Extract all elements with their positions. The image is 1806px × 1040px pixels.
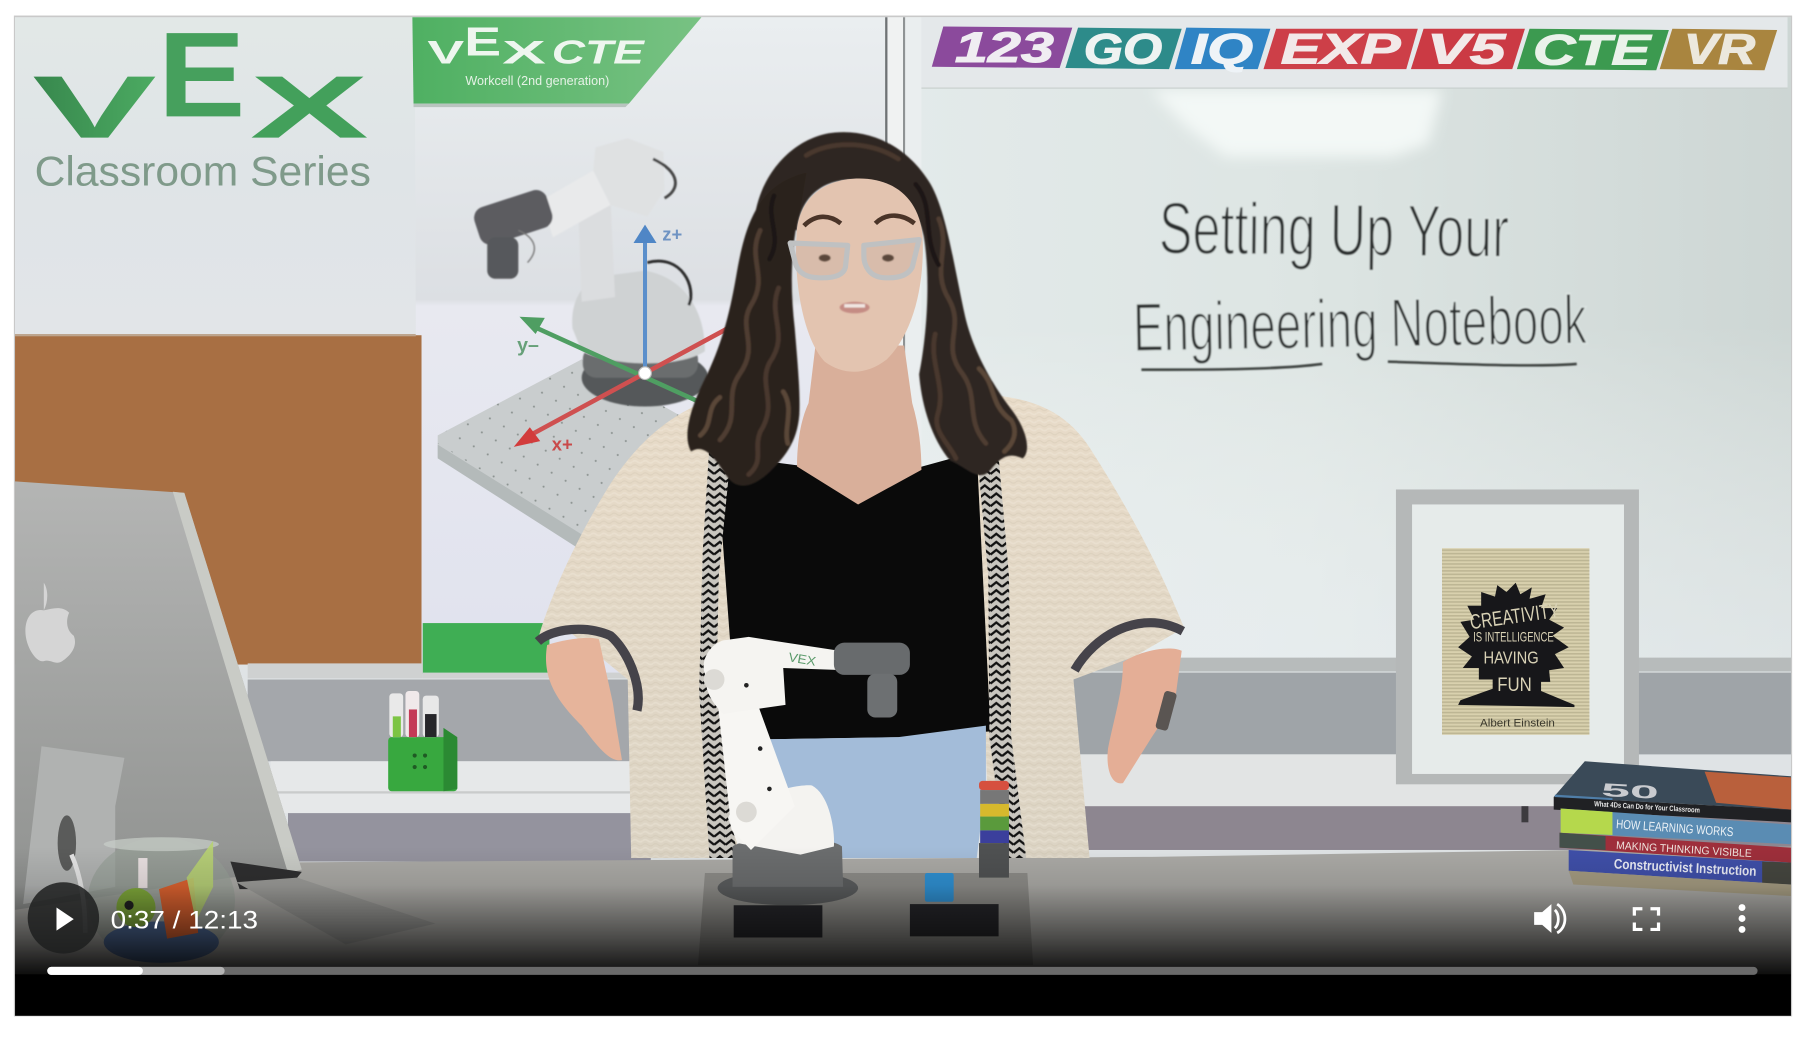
- presenter: [538, 132, 1184, 858]
- poster: VEX CTE workcell: [412, 17, 887, 674]
- apple logo: [25, 583, 75, 663]
- badge EXP: EXP: [1281, 25, 1401, 73]
- marker cup: [388, 691, 457, 791]
- black fixtures: [734, 904, 999, 937]
- keyboard: [236, 878, 435, 944]
- poster robot arm: [471, 138, 708, 407]
- playback time: 0:37 / 12:13: [111, 906, 258, 934]
- program banner: [921, 17, 1788, 89]
- desk: [15, 847, 1791, 977]
- badge VR: [1660, 25, 1777, 73]
- cardigan trim: [699, 438, 1026, 858]
- print attribution: Albert Einstein: [1480, 718, 1555, 730]
- VEX logo: E: [158, 7, 245, 142]
- ceiling light reflection: [1151, 90, 1442, 157]
- VEX logo: V: [32, 58, 157, 157]
- blue cube: [925, 873, 954, 902]
- whiteboard: [905, 17, 1791, 660]
- face: [796, 179, 923, 372]
- badge GO: GO: [1084, 25, 1162, 73]
- poster title banner: E: [464, 19, 501, 64]
- right hand: [1108, 648, 1182, 783]
- book making thinking visible: MAKING THINKING VISIBLE: [1616, 840, 1752, 860]
- poster title banner: CTE: [552, 34, 646, 71]
- robot gripper: [834, 643, 910, 718]
- volume icon: [1534, 904, 1565, 933]
- print quote: HAVING: [1483, 647, 1539, 667]
- book making thinking visible: [1559, 833, 1791, 863]
- print quote: FUN: [1497, 674, 1532, 696]
- axis arrows x y z: [514, 224, 743, 454]
- play button: [28, 882, 99, 954]
- badge V5: V5: [1427, 25, 1507, 73]
- poster title banner: [412, 17, 701, 107]
- player gradient overlay: [15, 847, 1791, 976]
- cork board: [15, 334, 422, 665]
- book constructivist instruction: [1569, 850, 1791, 885]
- line two: Engineering Notebook: [1132, 280, 1588, 366]
- black top: [716, 451, 991, 739]
- badge 123: 123: [955, 24, 1054, 72]
- book top: 50: [1601, 779, 1659, 803]
- dictionary page: [1442, 548, 1589, 735]
- robot arm: VEX: [787, 650, 818, 669]
- line one: Setting Up Your: [1159, 186, 1509, 273]
- stand: [23, 746, 124, 933]
- badge CTE: [1517, 26, 1669, 74]
- stack light: [979, 781, 1009, 878]
- fullscreen icon: [1634, 909, 1659, 929]
- glasses: [790, 240, 919, 278]
- VEX logo: X: [250, 58, 369, 157]
- print quote: [1469, 599, 1561, 696]
- glass bowl: [88, 837, 235, 964]
- framed print: [1396, 489, 1639, 784]
- badge EXP: [1263, 25, 1418, 73]
- badge 123: [932, 24, 1072, 72]
- book dark: [1554, 797, 1791, 822]
- poster title banner: X: [502, 34, 547, 70]
- lower wall and rail, left: [248, 663, 651, 861]
- iMac: [15, 481, 302, 933]
- logo subtitle: Classroom Series: [35, 147, 371, 194]
- badge IQ: [1175, 25, 1270, 73]
- badge IQ: IQ: [1191, 25, 1253, 73]
- more options icon: [1739, 904, 1745, 933]
- whiteboard handwriting: [1132, 186, 1588, 370]
- left wall panel: [15, 17, 416, 335]
- axis arrows x y z: y–: [517, 334, 539, 356]
- silhouette: [1458, 583, 1574, 707]
- book how learning works: HOW LEARNING WORKS: [1616, 817, 1734, 839]
- left mass: [687, 173, 806, 486]
- books: [1554, 761, 1791, 896]
- print quote: IS INTELLIGENCE: [1473, 629, 1554, 645]
- black player bar: [15, 974, 1791, 1016]
- book top: [1554, 761, 1791, 810]
- hair: [687, 132, 1027, 486]
- book dark: What 4Ds Can Do for Your Classroom: [1594, 799, 1700, 815]
- watch: [1155, 690, 1177, 731]
- right sleeve cuff: [1075, 623, 1183, 670]
- robot arm: [704, 637, 847, 855]
- badge GO: [1065, 25, 1182, 73]
- neck and chest: [797, 346, 921, 504]
- print quote: CREATIVITY: [1469, 599, 1561, 634]
- axis arrows x y z: x+: [552, 433, 573, 454]
- progress bar: [47, 967, 1758, 975]
- poster green footer: [423, 623, 549, 674]
- badge V5: [1411, 25, 1525, 73]
- device pad under screen: [230, 861, 302, 889]
- book how learning works: [1561, 809, 1791, 844]
- badge CTE: CTE: [1533, 26, 1653, 74]
- left sleeve cuff: [538, 629, 638, 711]
- curls: [700, 145, 1015, 475]
- left hand: [546, 638, 622, 760]
- blue skirt: [758, 726, 986, 858]
- poster title banner: Workcell (2nd generation): [465, 73, 609, 88]
- poster title banner: V: [427, 34, 465, 70]
- robot base: [718, 838, 858, 905]
- lower wall and rail, right: [1037, 658, 1791, 850]
- book constructivist instruction: Constructivist Instruction: [1613, 855, 1757, 879]
- eyes: [819, 255, 894, 261]
- badge VR: VR: [1684, 25, 1756, 73]
- table plate: [698, 873, 1033, 965]
- right mass: [754, 132, 1027, 475]
- screen back: [15, 481, 302, 910]
- cardigan: [538, 394, 1184, 858]
- mouth: [840, 302, 870, 313]
- divider strip: [885, 17, 905, 674]
- underlines: [1141, 362, 1577, 370]
- axis arrows x y z: z+: [662, 224, 682, 245]
- eyebrows: [804, 216, 915, 226]
- workcell base plate: [438, 359, 749, 551]
- VEX logo: [32, 7, 369, 157]
- workcell on the desk: [698, 637, 1033, 965]
